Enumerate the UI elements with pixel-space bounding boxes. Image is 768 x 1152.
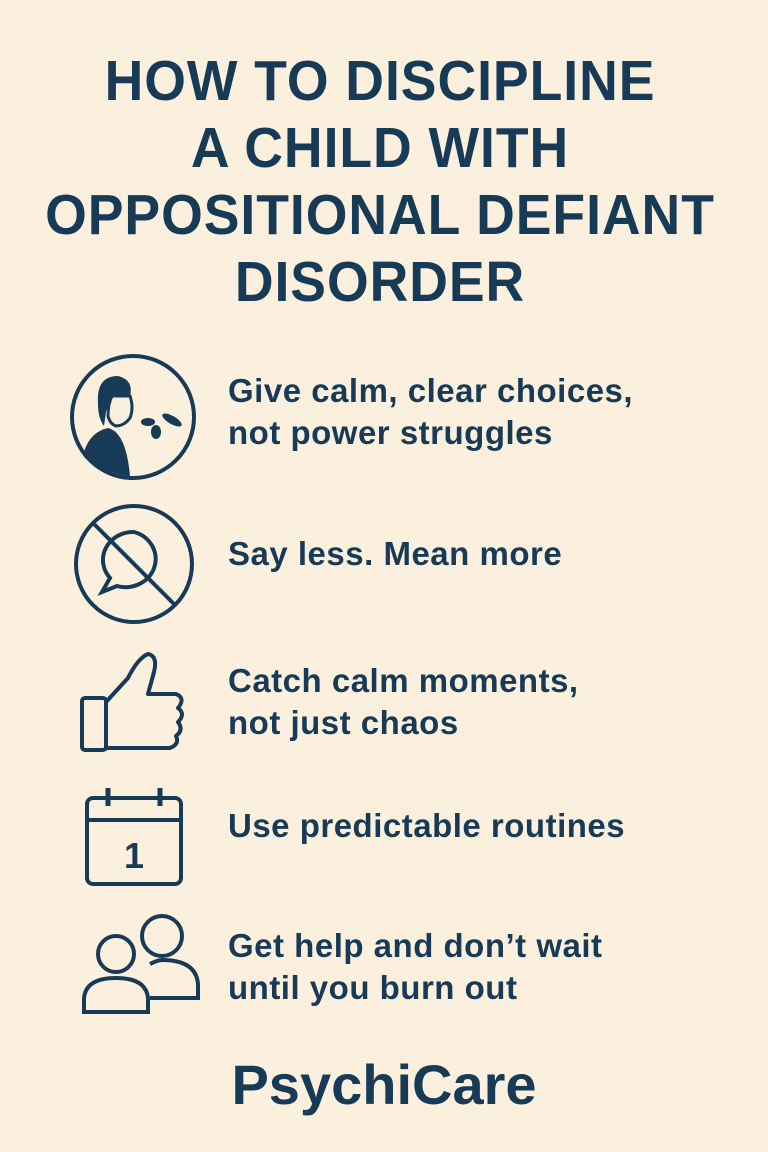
- icon: thumbs up: [80, 652, 184, 752]
- text: item 4: Use predictable routines: [228, 807, 625, 844]
- text: item 3: Catch calm moments,: [228, 662, 579, 699]
- text: item 5: [228, 927, 602, 1006]
- text: item 3: [228, 662, 579, 741]
- text: item 1: not power struggles: [228, 414, 553, 451]
- text: item 1: [228, 372, 633, 451]
- text: item 5: Get help and don’t wait: [228, 927, 602, 964]
- text: item 2: Say less. Mean more: [228, 535, 562, 572]
- title: OPPOSITIONAL DEFIANT: [45, 183, 715, 247]
- title: HOW TO DISCIPLINE: [105, 49, 655, 113]
- title: [45, 49, 715, 314]
- icon: calendar: [85, 788, 183, 886]
- text: item 1: Give calm, clear choices,: [228, 372, 633, 409]
- title: DISORDER: [235, 250, 525, 314]
- title: A CHILD WITH: [191, 116, 569, 180]
- icon: no talking: [74, 504, 194, 624]
- icon: person speaking: [70, 354, 196, 480]
- text: item 5: until you burn out: [228, 969, 517, 1006]
- icon: calendar: 1: [124, 835, 144, 876]
- footer brand: PsychiCare: [231, 1053, 537, 1116]
- icon: two people: [82, 914, 200, 1014]
- text: item 3: not just chaos: [228, 704, 459, 741]
